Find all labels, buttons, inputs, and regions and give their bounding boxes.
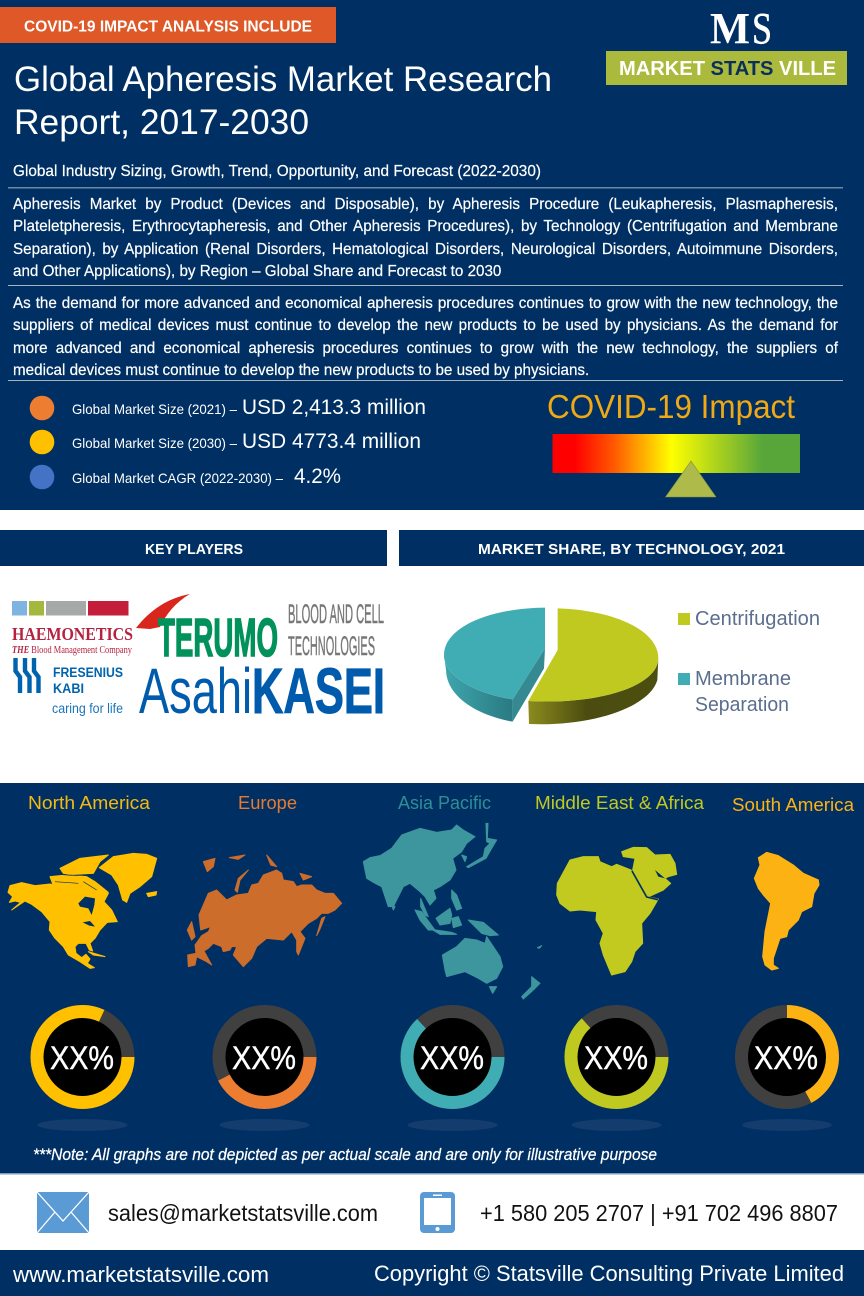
text: suppliers of medical devices must continue to develop the new products to be used by physicians. As the demand for (13, 317, 838, 334)
logo: Asahi Kasei: KASEI (252, 655, 385, 727)
region heading: Asia Pacific: Asia Pacific (398, 793, 491, 813)
pie slice: membrane separation (444, 608, 545, 722)
text: As the demand for more advanced and economical apheresis procedures continues to grow with the new technology, the (13, 295, 838, 312)
region heading: South America: South America (732, 795, 855, 815)
region heading: Europe: Europe (238, 793, 297, 813)
market share header: MARKET SHARE, BY TECHNOLOGY, 2021 (478, 541, 785, 558)
phone numbers: +1 580 205 2707 | +91 702 496 8807 (480, 1200, 838, 1226)
logo: Market Stats Ville: MARKET STATS VILLE (619, 58, 836, 80)
logo: Asahi Kasei: Asahi (139, 655, 252, 727)
note: ***Note: All graphs are not depicted as per actual scale and are only for illustrative purpose (33, 1145, 657, 1164)
text: and Other Applications), by Region – Global Share and Forecast to 2030 (13, 263, 501, 280)
logo: Fresenius Kabi: caring for life (52, 700, 123, 716)
title: Global Apheresis Market Research (14, 60, 552, 99)
logo: Market Stats Ville (606, 4, 847, 85)
covid banner: COVID-19 IMPACT ANALYSIS INCLUDE (24, 18, 312, 36)
covid-19 impact gauge (547, 388, 800, 497)
donut: Middle East and Africa: XX% (584, 1040, 648, 1076)
donut: Asia Pacific (407, 1012, 498, 1131)
icon: phone (420, 1192, 455, 1233)
logo: Terumo: TERUMO (158, 608, 278, 668)
map: North America (8, 853, 157, 968)
logo: Market Stats Ville: M (710, 4, 750, 53)
region heading: North America: North America (28, 793, 151, 813)
stat: market size 2030 (30, 430, 421, 454)
logo: Market Stats Ville: S (752, 4, 772, 53)
text: Plateletpheresis, Erythrocytapheresis, and Other Apheresis Procedures), by Technology (Centrifugation and Membrane (13, 218, 838, 235)
stat: CAGR: 4.2% (294, 465, 341, 488)
key player logos (12, 594, 385, 727)
key players header: KEY PLAYERS (145, 541, 243, 558)
email: sales@marketstatsville.com (108, 1200, 378, 1226)
covid banner (0, 7, 336, 43)
pie legend: Separation (695, 694, 789, 716)
donut: South America: XX% (754, 1040, 818, 1076)
title: Report, 2017-2030 (14, 103, 309, 142)
key players header (0, 530, 387, 566)
logo: Haemonetics (12, 601, 133, 656)
text: Separation), by Application (Renal Disorders, Hematological Disorders, Neurological Disorders, Autoimmune Disorders, (13, 241, 838, 258)
region heading: Middle East & Africa: Middle East & Africa (535, 793, 705, 813)
text: Apheresis Market by Product (Devices and Disposable), by Apheresis Procedure (Leukapheresis, Plasmapheresis, (13, 196, 838, 213)
website: www.marketstatsville.com (12, 1262, 269, 1287)
pie legend: Centrifugation (695, 608, 820, 630)
stat: market size 2021 (30, 396, 426, 420)
title (14, 60, 552, 142)
donut: North America: XX% (50, 1040, 114, 1076)
stat: market size 2021: USD 2,413.3 million (242, 396, 426, 419)
stat: CAGR (30, 465, 341, 489)
text: medical devices must continue to develop the new products to be used by physicians. (13, 362, 589, 379)
pie legend (678, 608, 820, 716)
map: Middle East and Africa (557, 847, 677, 975)
pie legend: Membrane (695, 668, 791, 690)
covid-19 impact gauge: COVID-19 Impact (547, 388, 795, 425)
market stats list (30, 396, 426, 489)
footer bar (0, 1250, 864, 1296)
regional panel (0, 783, 864, 1173)
map: South America (754, 852, 819, 970)
text block: market segmentation (12, 196, 838, 280)
donut: Europe: XX% (232, 1040, 296, 1076)
market share header (399, 530, 864, 566)
map: Asia Pacific (363, 823, 542, 999)
logo: Fresenius Kabi (16, 658, 123, 716)
stat: market size 2030: USD 4773.4 million (242, 430, 421, 453)
donut: Middle East and Africa (571, 1012, 662, 1131)
text: more advanced and economical apheresis procedures continues to grow with the new technology, the suppliers of (13, 340, 838, 357)
pie chart: market share by technology (444, 608, 658, 724)
top navy panel (0, 0, 864, 510)
stat: market size 2021: Global Market Size (2021) – (72, 401, 237, 417)
stat: market size 2030: Global Market Size (2030) – (72, 435, 237, 451)
logo: Haemonetics: THE Blood Management Company (12, 645, 133, 656)
logo: Asahi Kasei (139, 655, 385, 727)
donut: North America (37, 1012, 128, 1131)
pie slice: centrifugation (528, 608, 658, 724)
subtitle: Global Industry Sizing, Growth, Trend, Opportunity, and Forecast (2022-2030) (13, 163, 541, 180)
logo: Fresenius Kabi: FRESENIUS (53, 665, 123, 680)
text: TECHNOLOGIES (288, 631, 375, 661)
donut: South America (742, 1012, 832, 1131)
donut: Europe (219, 1012, 310, 1131)
stat: CAGR: Global Market CAGR (2022-2030) – (72, 470, 283, 486)
text block: market description (12, 295, 838, 379)
copyright: Copyright © Statsville Consulting Private Limited (374, 1261, 844, 1286)
donut: Asia Pacific: XX% (420, 1040, 484, 1076)
logo: Fresenius Kabi: KABI (53, 681, 84, 696)
map: Europe and Russia (187, 855, 342, 967)
text: BLOOD AND CELL (288, 599, 384, 629)
logo: Haemonetics: HAEMONETICS (12, 624, 133, 644)
icon: envelope (37, 1192, 89, 1233)
